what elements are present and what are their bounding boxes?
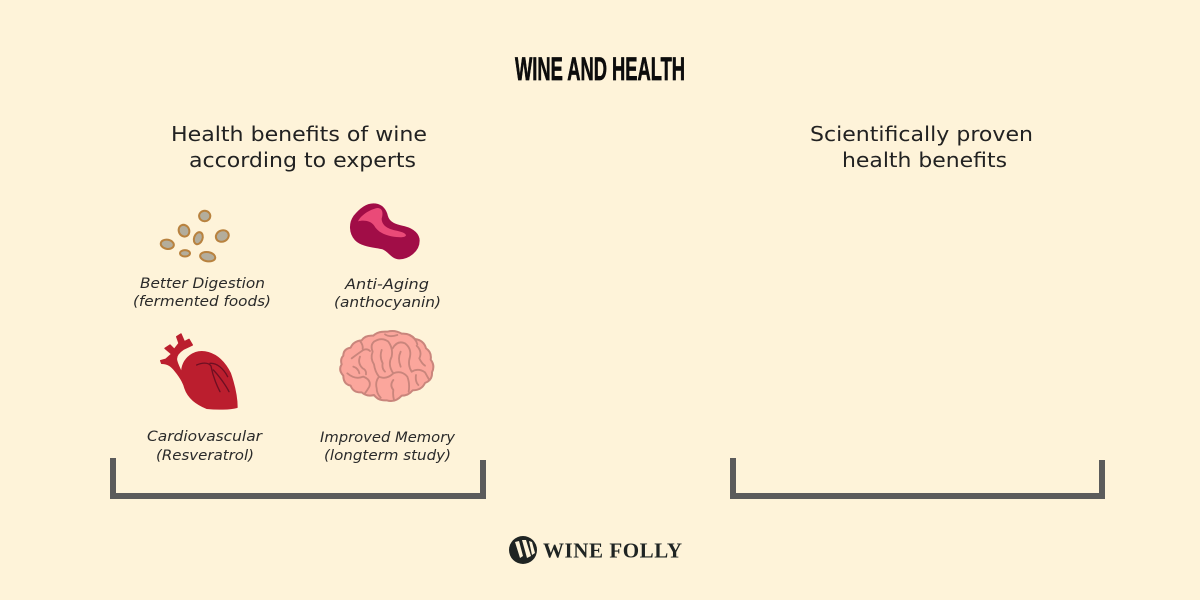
heading: scientifically proven health benefits: health benefits <box>842 148 1007 172</box>
label: cardiovascular: Cardiovascular <box>147 429 263 445</box>
logo: wine folly: WINE FOLLY <box>543 538 682 562</box>
label: improved memory <box>320 430 456 464</box>
heading: health benefits according to experts: according to experts <box>189 148 416 172</box>
label: anti-aging <box>334 277 441 311</box>
icon: anthocyanin blob <box>351 204 419 259</box>
label: improved memory: Improved Memory <box>320 430 456 446</box>
title: WINE AND HEALTH <box>515 51 685 87</box>
label: better digestion <box>133 276 271 310</box>
logo: wine folly <box>509 536 682 564</box>
icon: brain <box>340 331 433 401</box>
label: cardiovascular: (Resveratrol) <box>156 448 254 464</box>
bracket: right <box>733 458 1102 496</box>
label: anti-aging: (anthocyanin) <box>334 295 441 311</box>
label: improved memory: (longterm study) <box>324 448 451 464</box>
label: cardiovascular <box>147 429 263 464</box>
label: anti-aging: Anti-Aging <box>344 277 429 293</box>
heading: scientifically proven health benefits: Scientifically proven <box>810 122 1033 146</box>
bracket: left <box>113 458 483 496</box>
label: better digestion: (fermented foods) <box>133 294 271 310</box>
heading: health benefits according to experts: Health benefits of wine <box>171 122 427 146</box>
icon: fermented food seeds <box>160 211 231 263</box>
heading: health benefits according to experts <box>171 122 427 172</box>
label: better digestion: Better Digestion <box>140 276 265 292</box>
icon: heart <box>161 334 237 409</box>
heading: scientifically proven health benefits <box>810 122 1033 172</box>
